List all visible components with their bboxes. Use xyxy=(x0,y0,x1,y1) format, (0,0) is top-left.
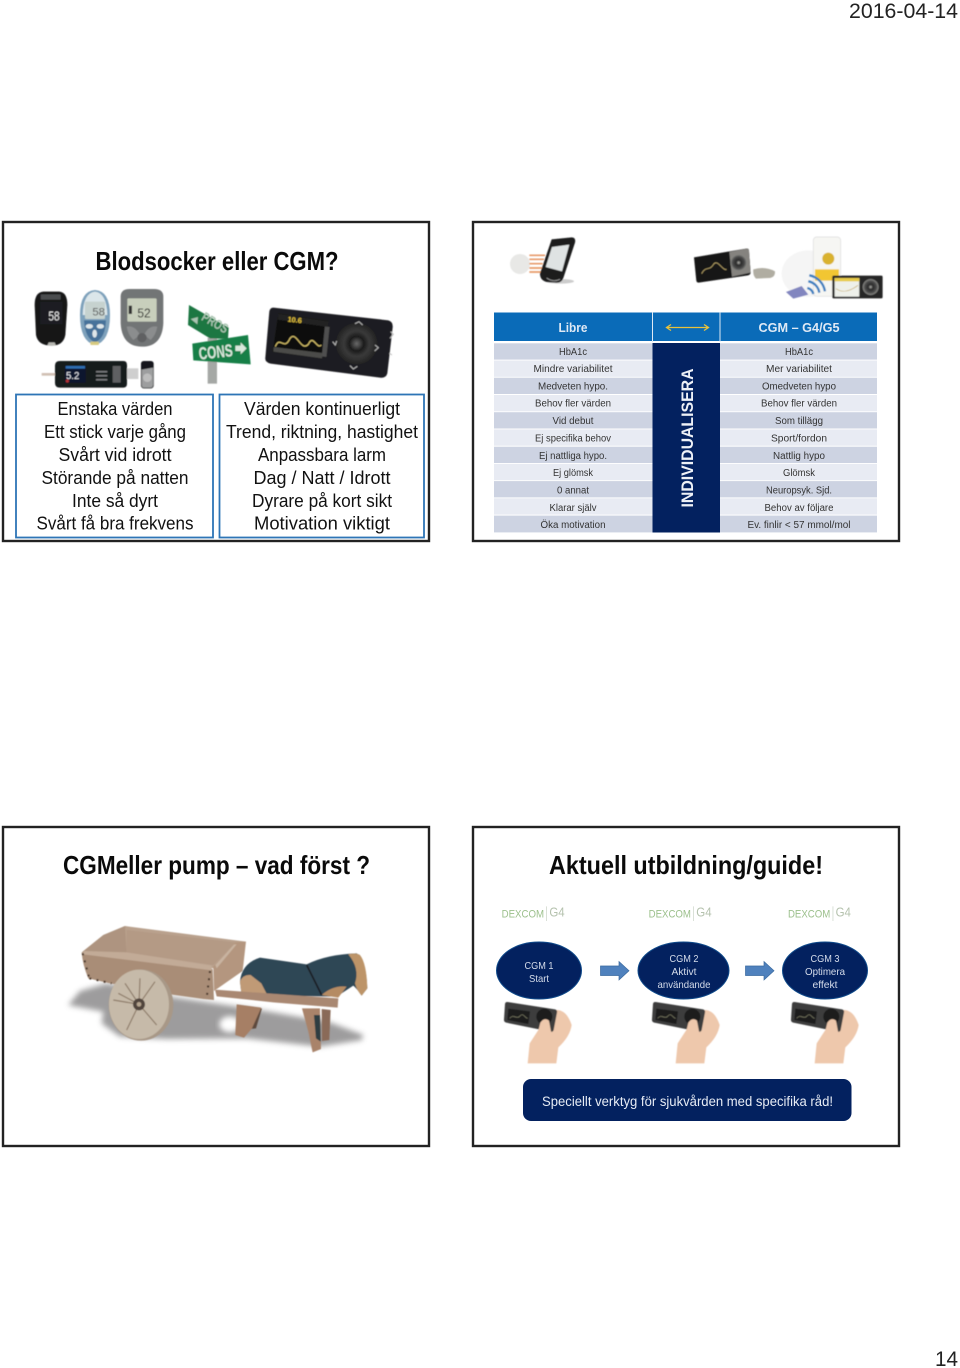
text box: blood glucose: Svårt vid idrott xyxy=(58,445,172,465)
logo: dexcom 2 xyxy=(649,906,712,921)
step: CGM 2 xyxy=(638,942,729,999)
text box: CGM: Motivation viktigt xyxy=(254,514,390,534)
step: CGM 3: CGM 3 xyxy=(810,954,840,965)
libre column: Medveten hypo. xyxy=(538,382,608,392)
logo: dexcom 3 xyxy=(788,906,851,921)
center column: individualisera xyxy=(652,343,720,532)
step: CGM 1: Start xyxy=(529,974,549,985)
step: CGM 2: Aktivt xyxy=(672,967,697,978)
CGM column: Behov av följare xyxy=(764,503,834,514)
panel: CGM eller pump xyxy=(3,827,429,1146)
text box: CGM: Dyrare på kort sikt xyxy=(252,491,392,511)
step: CGM 1 xyxy=(496,942,582,999)
illustration: wooden horse and cart xyxy=(68,926,367,1052)
CGM column: Nattlig hypo xyxy=(773,451,826,462)
panel: libre versus CGM xyxy=(473,222,899,541)
panel: aktuell utbildning xyxy=(473,827,899,1146)
table header xyxy=(494,312,877,342)
cart body xyxy=(82,926,246,1000)
heading: aktuell utbildning: Aktuell utbildning/guide! xyxy=(549,850,823,880)
icon: glucose meters: 58 xyxy=(92,307,105,319)
step: CGM 2: användande xyxy=(658,980,711,991)
icon: CGM receiver xyxy=(265,308,393,378)
libre column: Ej nattliga hypo. xyxy=(539,451,607,462)
logo: dexcom 1: G4 xyxy=(549,906,565,920)
panel: blodsocker eller CGM xyxy=(3,222,429,541)
CGM column: HbA1c xyxy=(785,347,813,358)
logo: dexcom 1 xyxy=(502,906,565,921)
libre column xyxy=(534,347,613,531)
text box: blood glucose: Störande på natten xyxy=(42,468,188,488)
logo: dexcom 1: DEXCOM xyxy=(502,909,544,921)
text box: blood glucose: Svårt få bra frekvens xyxy=(36,514,194,534)
arrow: step 1 to 2 xyxy=(600,962,629,980)
libre column: Ej glömsk xyxy=(553,468,593,479)
CGM column: Behov fler värden xyxy=(761,398,837,410)
CGM column xyxy=(748,347,850,531)
step: CGM 3: effekt xyxy=(812,980,838,991)
icon: pros and cons street sign: CONS xyxy=(198,340,234,364)
libre column: Behov fler värden xyxy=(535,398,611,410)
arrow: step 2 to 3 xyxy=(746,962,774,980)
text box: CGM: Dag / Natt / Idrott xyxy=(254,468,390,488)
icon: hand with receiver 2 xyxy=(652,1002,720,1063)
libre column: Mindre variabilitet xyxy=(534,364,613,375)
highlight between legs xyxy=(219,1016,241,1032)
icon: pros and cons street sign xyxy=(188,305,251,384)
table header: CGM – G4/G5 xyxy=(758,320,840,335)
center column: individualisera: INDIVIDUALISERA xyxy=(679,368,697,508)
logo: dexcom 3: G4 xyxy=(836,906,851,920)
icon: double arrow xyxy=(666,324,708,330)
CGM column: Som tillägg xyxy=(775,416,823,427)
step: CGM 1: CGM 1 xyxy=(524,961,554,972)
icon: glucose meters: 52 xyxy=(137,306,151,321)
icon: glucose meters: 58 xyxy=(48,309,60,323)
heading: blodsocker: Blodsocker eller CGM? xyxy=(96,246,338,276)
CGM column: Glömsk xyxy=(783,468,815,479)
icon: hand with receiver 1 xyxy=(504,1002,572,1063)
CGM column: Omedveten hypo xyxy=(762,382,837,392)
icon: glucose meters xyxy=(35,289,163,388)
horse xyxy=(215,953,367,1052)
libre column: HbA1c xyxy=(559,347,587,358)
libre column: Vid debut xyxy=(552,416,594,427)
heading: CGM eller pump: CGMeller pump – vad först ? xyxy=(63,850,370,880)
text box: blood glucose: Ett stick varje gång xyxy=(44,422,186,442)
comparison table xyxy=(494,312,877,532)
table header: Libre xyxy=(558,320,588,335)
callout: special tool xyxy=(523,1079,852,1121)
icon: CGM receiver: 10.6 xyxy=(287,315,302,325)
CGM column: Neuropsyk. Sjd. xyxy=(766,486,832,496)
step: CGM 3 xyxy=(782,942,868,999)
CGM column: Sport/fordon xyxy=(771,434,827,444)
libre column: Öka motivation xyxy=(540,520,606,531)
logo: dexcom 2: DEXCOM xyxy=(649,909,691,921)
table row backgrounds xyxy=(494,343,877,532)
libre column: Ej specifika behov xyxy=(535,434,611,444)
text box: CGM: Värden kontinuerligt xyxy=(244,399,400,419)
text box: CGM: Trend, riktning, hastighet xyxy=(226,422,418,442)
text box: blood glucose: Inte så dyrt xyxy=(72,491,158,511)
logo: dexcom 3: DEXCOM xyxy=(788,909,830,921)
icon: CGM receiver with sensor xyxy=(694,249,775,283)
step: CGM 2: CGM 2 xyxy=(670,954,699,965)
callout: special tool: Speciellt verktyg för sjukvården med specifika råd! xyxy=(542,1094,833,1109)
icon: phone with wireless transmitter and receiver xyxy=(782,237,883,299)
step: CGM 3: Optimera xyxy=(805,967,845,978)
logo: dexcom 2: G4 xyxy=(696,906,712,920)
icon: hand with receiver 3 xyxy=(791,1002,859,1063)
text box: blood glucose: Enstaka värden xyxy=(58,399,172,419)
cart wheel xyxy=(109,969,173,1041)
libre column: Klarar själv xyxy=(550,503,597,514)
icon: pros and cons street sign: PROS xyxy=(199,309,231,336)
text box: blood glucose xyxy=(16,394,213,538)
libre column: 0 annat xyxy=(557,486,589,496)
CGM column: Mer variabilitet xyxy=(766,364,832,375)
text box: CGM: Anpassbara larm xyxy=(258,445,386,465)
cart and horse shadow xyxy=(68,983,363,1047)
CGM column: Ev. finlir < 57 mmol/mol xyxy=(748,520,850,531)
text box: CGM xyxy=(220,394,424,538)
icon: libre reader and sensor xyxy=(510,237,575,284)
icon: glucose meters: 5.2 xyxy=(66,371,79,382)
